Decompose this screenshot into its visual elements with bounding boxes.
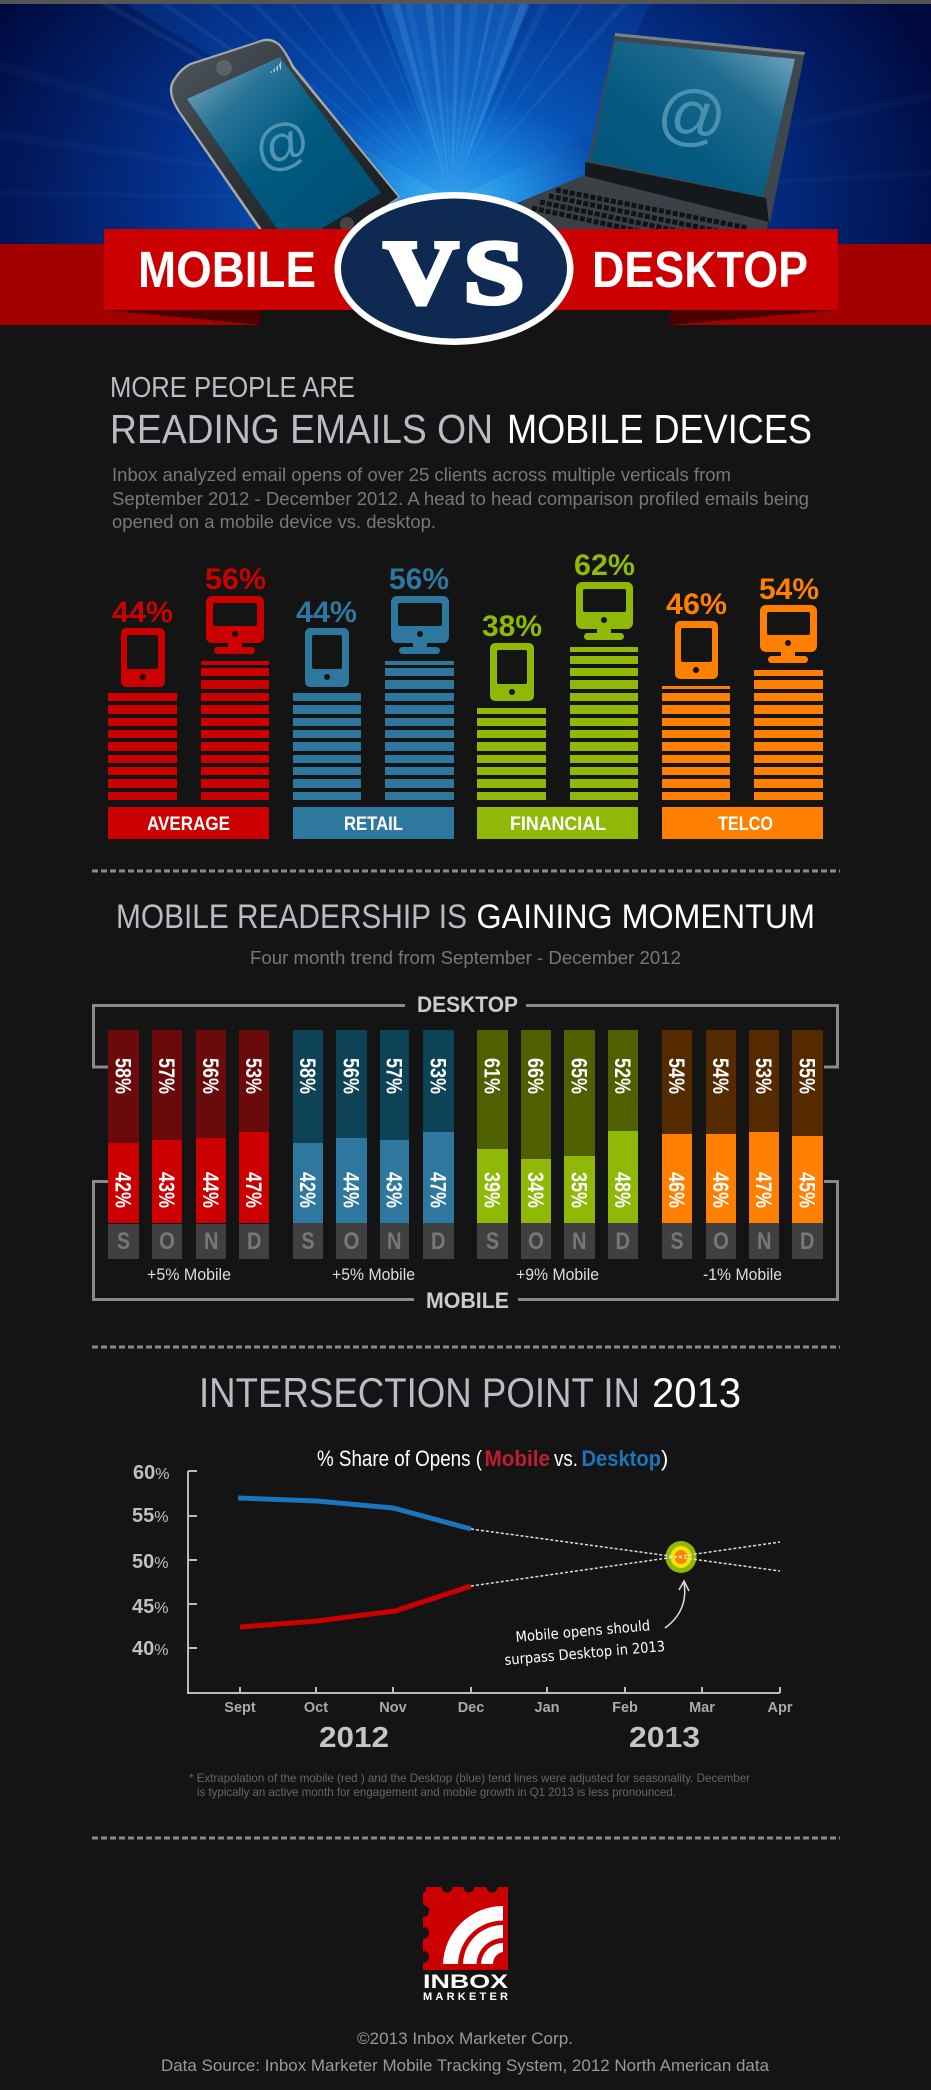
extrapolated dotted lines [471,1529,780,1586]
x axis labels: Mar [689,1700,715,1716]
label: retail [293,807,454,839]
desktop stack [570,647,638,800]
icon: monitor [576,582,633,640]
note: +5% mobile: +5% Mobile [147,1265,231,1284]
y axis labels: 60% [133,1462,169,1484]
year labels [319,1722,700,1754]
logo: inbox marketer: MARKETER [423,1991,508,2003]
label: desktop: DESKTOP [592,241,808,298]
intersection target [666,1541,696,1573]
mobile stack [477,708,546,800]
mobile stack [108,693,177,800]
chart: financial monthly trend: 48% [610,1172,635,1208]
desktop stack [754,670,823,800]
note: -1% mobile: -1% Mobile [703,1265,782,1284]
heading: reading emails on mobile devices [110,406,812,452]
chart: telco monthly trend: D [800,1228,814,1255]
icon: phone [490,643,534,701]
label: financial: FINANCIAL [510,814,606,835]
label: financial [477,807,638,839]
year labels: 2013 [629,1722,700,1754]
percent: financial mobile: 38% [482,610,542,643]
chart: financial monthly trend: S [486,1228,499,1255]
bracket: mobile [94,1182,838,1313]
chart title: % Share of Opens ( [317,1446,483,1471]
footnote [189,1771,750,1799]
chart: average monthly trend: 57% [154,1058,179,1094]
heading: reading emails on mobile devices: MOBILE DEVICES [507,406,812,452]
chart: financial monthly trend: 34% [523,1172,548,1208]
heading: intersection point in 2013: 2013 [652,1369,741,1416]
footer copyright: ©2013 Inbox Marketer Corp. [357,2029,573,2048]
heading: mobile readership is gaining momentum: MOBILE READERSHIP IS [116,898,467,936]
chart: retail monthly trend: D [431,1228,446,1255]
icon: laptop [517,33,805,240]
icon: monitor [206,596,264,654]
bracket: mobile: MOBILE [426,1288,509,1313]
x axis labels: Apr [768,1700,793,1716]
percent: telco mobile: 46% [666,588,727,621]
chart: retail monthly trend: 44% [338,1172,364,1208]
year labels: 2012 [319,1722,389,1754]
chart: retail monthly trend [293,1030,454,1284]
chart: average monthly trend [108,1030,269,1284]
red ribbon [0,229,931,325]
trend: desktop line [238,1498,471,1529]
vs badge: V [384,224,458,322]
note: +9% mobile: +9% Mobile [516,1265,599,1284]
arrow to intersection [665,1581,689,1628]
chart title: Desktop [582,1446,661,1471]
chart: average monthly trend: 43% [154,1172,179,1208]
chart: telco monthly trend: 47% [751,1172,776,1208]
heading: intersection point in 2013: INTERSECTION POINT IN [199,1369,640,1416]
x axis labels: Nov [379,1700,407,1716]
chart: financial monthly trend: 35% [566,1172,592,1208]
y axis labels: 50% [132,1551,168,1573]
intro paragraph [112,465,809,532]
mobile stack [662,686,730,800]
handwritten note: Mobile opens should [515,1618,651,1646]
icon: at sign on laptop: @ [654,74,730,156]
intro paragraph: September 2012 - December 2012. A head to head comparison profiled emails being [112,489,809,509]
y axis labels: 40% [132,1638,168,1660]
handwritten note: surpass Desktop in 2013 [504,1639,666,1669]
chart: telco monthly trend: O [713,1228,729,1255]
label: mobile: MOBILE [138,241,316,298]
chart: retail monthly trend: 47% [426,1172,450,1208]
icon: phone [305,628,349,687]
logo: inbox marketer [423,1887,508,2003]
percent: retail desktop: 56% [389,563,449,596]
label: average [108,807,269,839]
chart title: vs. [554,1446,578,1471]
chart: average monthly trend: 44% [198,1172,223,1208]
chart: financial monthly trend: 39% [480,1172,504,1208]
x axis labels: Oct [304,1700,328,1716]
x axis labels: Jan [534,1700,560,1716]
x axis labels: Feb [612,1700,638,1716]
chart: financial monthly trend: 52% [610,1058,635,1094]
chart: average monthly trend: 58% [110,1058,136,1094]
intro paragraph: opened on a mobile device vs. desktop. [112,512,436,532]
chart: financial monthly trend: N [572,1228,586,1255]
chart: average monthly trend: 56% [198,1058,223,1094]
chart: telco monthly trend [662,1030,823,1284]
chart: telco monthly trend: 45% [794,1172,820,1208]
bracket: desktop [94,992,838,1067]
icon: monitor [760,605,817,663]
label: retail: RETAIL [344,814,403,835]
subheading: four month trend: Four month trend from September - December 2012 [250,948,681,968]
y axis labels: 45% [132,1596,168,1618]
heading: mobile readership is gaining momentum: GAINING MOMENTUM [476,898,815,936]
chart: financial monthly trend: 61% [480,1058,504,1094]
chart: telco monthly trend: S [670,1228,684,1255]
label: telco [662,807,823,839]
chart: share of opens line chart [132,1446,793,1754]
percent: financial desktop: 62% [574,549,635,582]
chart: telco monthly trend: 53% [751,1058,776,1094]
chart: financial bars [477,549,638,839]
chart: average monthly trend: 53% [241,1058,266,1094]
chart: retail monthly trend: 43% [382,1172,406,1208]
trend: mobile line [240,1586,471,1627]
chart: retail monthly trend: N [387,1228,402,1255]
mobile stack [293,693,361,800]
chart: retail monthly trend: 58% [295,1058,320,1094]
chart: telco bars [662,573,823,839]
footer data source: Data Source: Inbox Marketer Mobile Tracking System, 2012 North American data [161,2056,770,2075]
chart: financial monthly trend: O [528,1228,544,1255]
heading: more people are: MORE PEOPLE ARE [110,372,355,404]
chart: retail monthly trend: 56% [338,1058,364,1094]
chart: telco monthly trend: 46% [708,1172,733,1208]
chart: telco monthly trend: 55% [794,1058,820,1094]
chart: average monthly trend: S [117,1228,130,1255]
vs badge: S [464,224,524,322]
chart: retail monthly trend: S [302,1228,314,1255]
chart: average monthly trend: 42% [110,1172,136,1208]
logo: inbox marketer: INBOX [423,1971,508,1993]
chart title [317,1446,668,1471]
heading: mobile readership is gaining momentum [116,898,815,936]
icon: phone [121,628,165,687]
chart: average monthly trend: N [204,1228,218,1255]
desktop stack [385,661,454,800]
x axis labels: Dec [458,1700,484,1716]
y axis labels: 55% [132,1505,168,1527]
chart: telco monthly trend: 54% [708,1058,733,1094]
chart: financial monthly trend: 65% [566,1058,592,1094]
label: average: AVERAGE [147,814,230,835]
percent: average mobile: 44% [112,596,173,629]
chart: average monthly trend: O [159,1228,175,1255]
panel: hero header [0,0,931,345]
chart: retail monthly trend: 42% [295,1172,320,1208]
chart: financial monthly trend [477,1030,638,1284]
chart: telco monthly trend: 54% [664,1058,689,1094]
chart: financial monthly trend: D [616,1228,630,1255]
note: +5% mobile: +5% Mobile [332,1265,415,1284]
chart: retail monthly trend: 53% [426,1058,450,1094]
y axis labels [132,1462,169,1660]
chart: retail monthly trend: 57% [382,1058,406,1094]
chart title: ) [661,1446,668,1471]
x axis labels [224,1700,793,1716]
label: telco: TELCO [718,814,773,835]
chart: financial monthly trend: 66% [523,1058,548,1094]
chart title: Mobile [484,1446,550,1471]
chart: average monthly trend: D [247,1228,262,1255]
hero background rays [0,4,931,245]
handwritten note [504,1618,666,1669]
chart: average monthly trend: 47% [241,1172,266,1208]
icon: at sign on phone: @ [247,107,317,181]
icon: phone [675,621,718,679]
percent: retail mobile: 44% [296,596,357,629]
vs badge [334,192,574,345]
desktop stack [201,661,269,800]
chart: retail bars [293,563,454,839]
chart: average bars [108,563,269,839]
bracket: desktop: DESKTOP [417,992,518,1017]
chart: telco monthly trend: 46% [664,1172,689,1208]
percent: telco desktop: 54% [759,573,819,606]
icon: smartphone [170,39,400,240]
footnote: is typically an active month for engagement and mobile growth in Q1 2013 is less pronounced. [197,1785,676,1799]
chart: telco monthly trend: N [757,1228,772,1255]
footnote: * Extrapolation of the mobile (red ) and the Desktop (blue) tend lines were adjusted for seasonality. December [189,1771,750,1785]
icon: monitor [391,596,449,654]
heading: reading emails on mobile devices: READING EMAILS ON [110,406,493,452]
x axis labels: Sept [224,1700,256,1716]
percent: average desktop: 56% [205,563,266,596]
axes [188,1471,780,1693]
intro paragraph: Inbox analyzed email opens of over 25 clients across multiple verticals from [112,465,731,485]
chart: retail monthly trend: O [344,1228,360,1255]
